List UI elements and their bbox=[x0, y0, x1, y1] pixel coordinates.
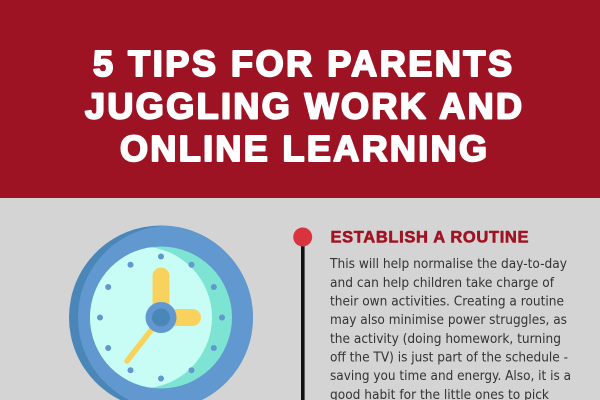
title: ONLINE LEARNING bbox=[120, 128, 487, 169]
title bbox=[85, 43, 522, 169]
header band bbox=[0, 0, 600, 198]
body text: off the TV) is just part of the schedule - bbox=[330, 350, 568, 366]
timeline line bbox=[301, 240, 305, 400]
body text: saving you time and energy. Also, it is a bbox=[330, 368, 571, 384]
heading: establish a routine: ESTABLISH A ROUTINE bbox=[330, 228, 528, 246]
body text: This will help normalise the day-to-day bbox=[329, 256, 567, 272]
body text: the activity (doing homework, turning bbox=[330, 331, 561, 347]
title: 5 TIPS FOR PARENTS bbox=[93, 43, 512, 84]
icon: clock bbox=[69, 226, 262, 400]
body text: may also minimise power struggles, as bbox=[330, 312, 567, 328]
body text bbox=[329, 256, 571, 400]
title: JUGGLING WORK AND bbox=[85, 86, 522, 126]
timeline marker bbox=[293, 228, 312, 246]
body text: their own activities. Creating a routine bbox=[330, 294, 564, 310]
body text: and can help children take charge of bbox=[330, 275, 555, 291]
